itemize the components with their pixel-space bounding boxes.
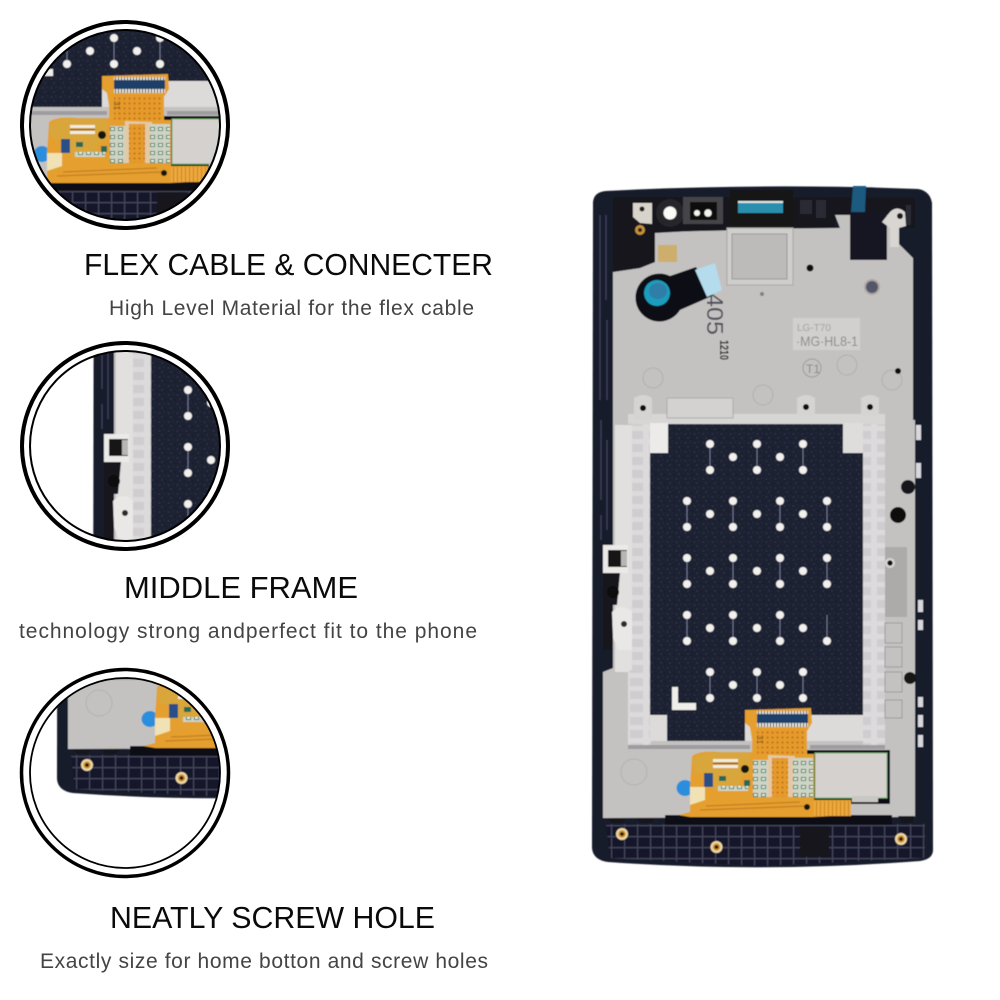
blue dot behind flex	[676, 780, 694, 796]
left inner rail	[615, 425, 632, 672]
dot connecting lines	[687, 448, 827, 694]
left rib band	[628, 417, 651, 745]
camera flex blue lens	[644, 280, 670, 306]
black backing for shield	[805, 750, 890, 804]
corner block right	[843, 423, 863, 453]
heading: screw hole: NEATLY SCREW HOLE	[110, 900, 435, 935]
brass screw holes	[616, 828, 907, 853]
molded T1 mark: T1	[806, 362, 820, 376]
circle detail: flex cable	[20, 20, 230, 230]
gold contact pad	[658, 245, 677, 262]
text: middle frame description: technology strong andperfect fit to the phone	[19, 620, 477, 643]
left side black recess	[603, 573, 620, 650]
molded model label: ·MG·HL8-1	[796, 333, 858, 349]
left rail edge details	[601, 420, 607, 540]
shield tab	[852, 796, 878, 802]
flex print 31: 31	[755, 735, 764, 744]
heading: flex cable: FLEX CABLE & CONNECTER	[84, 247, 493, 282]
board component columns	[753, 755, 813, 797]
flex black hole	[741, 765, 749, 773]
holes in gray body	[760, 264, 901, 374]
flex window with blue	[704, 773, 713, 787]
light blue sticker	[695, 263, 722, 297]
corner block left	[650, 423, 668, 453]
printed date code 0405: 405	[702, 293, 728, 335]
lower frame rail	[628, 745, 885, 749]
outer black frame	[592, 186, 933, 867]
bottom flex lines	[700, 802, 806, 810]
molded model label	[793, 318, 860, 350]
brass screw top left	[635, 225, 645, 235]
lower lighter band	[650, 715, 863, 741]
bottom teeth	[608, 816, 915, 823]
printed date code 1210: 1210	[717, 340, 731, 360]
circle detail: middle frame	[20, 341, 230, 551]
dark speckled panel	[650, 424, 863, 741]
gray body	[603, 215, 915, 818]
flex connector	[757, 711, 808, 727]
text: screw hole description: Exactly size for home botton and screw holes	[40, 950, 488, 973]
right flex ribbed tail	[814, 801, 851, 816]
small green components	[718, 776, 750, 791]
left side bracket with square window	[603, 545, 628, 573]
top cross rail	[628, 414, 885, 424]
top dark component band	[613, 197, 915, 272]
right rib band	[863, 417, 885, 745]
heading: middle frame: MIDDLE FRAME	[124, 570, 358, 605]
gray molded circle marks	[643, 355, 902, 405]
panel white dots	[683, 440, 831, 702]
bottom center block	[800, 826, 829, 857]
silver shield plate	[815, 753, 887, 798]
left frame detail lines	[600, 215, 607, 400]
camera flex black round part	[635, 267, 712, 322]
upper screw tabs	[634, 395, 879, 420]
left screw lobe	[612, 607, 632, 650]
square gray frame	[727, 228, 793, 285]
circle detail: screw hole	[20, 668, 230, 878]
right side features	[885, 480, 916, 718]
connector pad grid	[757, 729, 804, 754]
right edge white slots	[916, 425, 923, 747]
molded T1 mark	[803, 359, 821, 377]
front camera lens	[656, 199, 684, 227]
white component strip	[713, 759, 738, 768]
bottom black bar	[665, 815, 892, 825]
lower gray circle marks	[621, 759, 647, 785]
bottom grid band	[606, 824, 925, 866]
white clip top right	[882, 208, 906, 247]
top band dark detail blocks	[800, 200, 911, 225]
text: flex cable description: High Level Material for the flex cable	[109, 297, 474, 320]
blue flex tab on top edge	[851, 186, 866, 212]
molded model label: LG-T70	[797, 323, 831, 334]
phone middle frame photo	[592, 186, 933, 867]
left flex gold section	[692, 752, 750, 790]
earpiece speaker	[730, 190, 793, 227]
right black bay	[850, 212, 887, 260]
flex tail hole	[804, 804, 810, 810]
letter L mark	[672, 687, 696, 710]
sensor window	[683, 197, 723, 224]
flex cable orange body	[678, 708, 851, 817]
white tab top left	[633, 203, 652, 224]
cream triangle on flex	[690, 787, 705, 805]
